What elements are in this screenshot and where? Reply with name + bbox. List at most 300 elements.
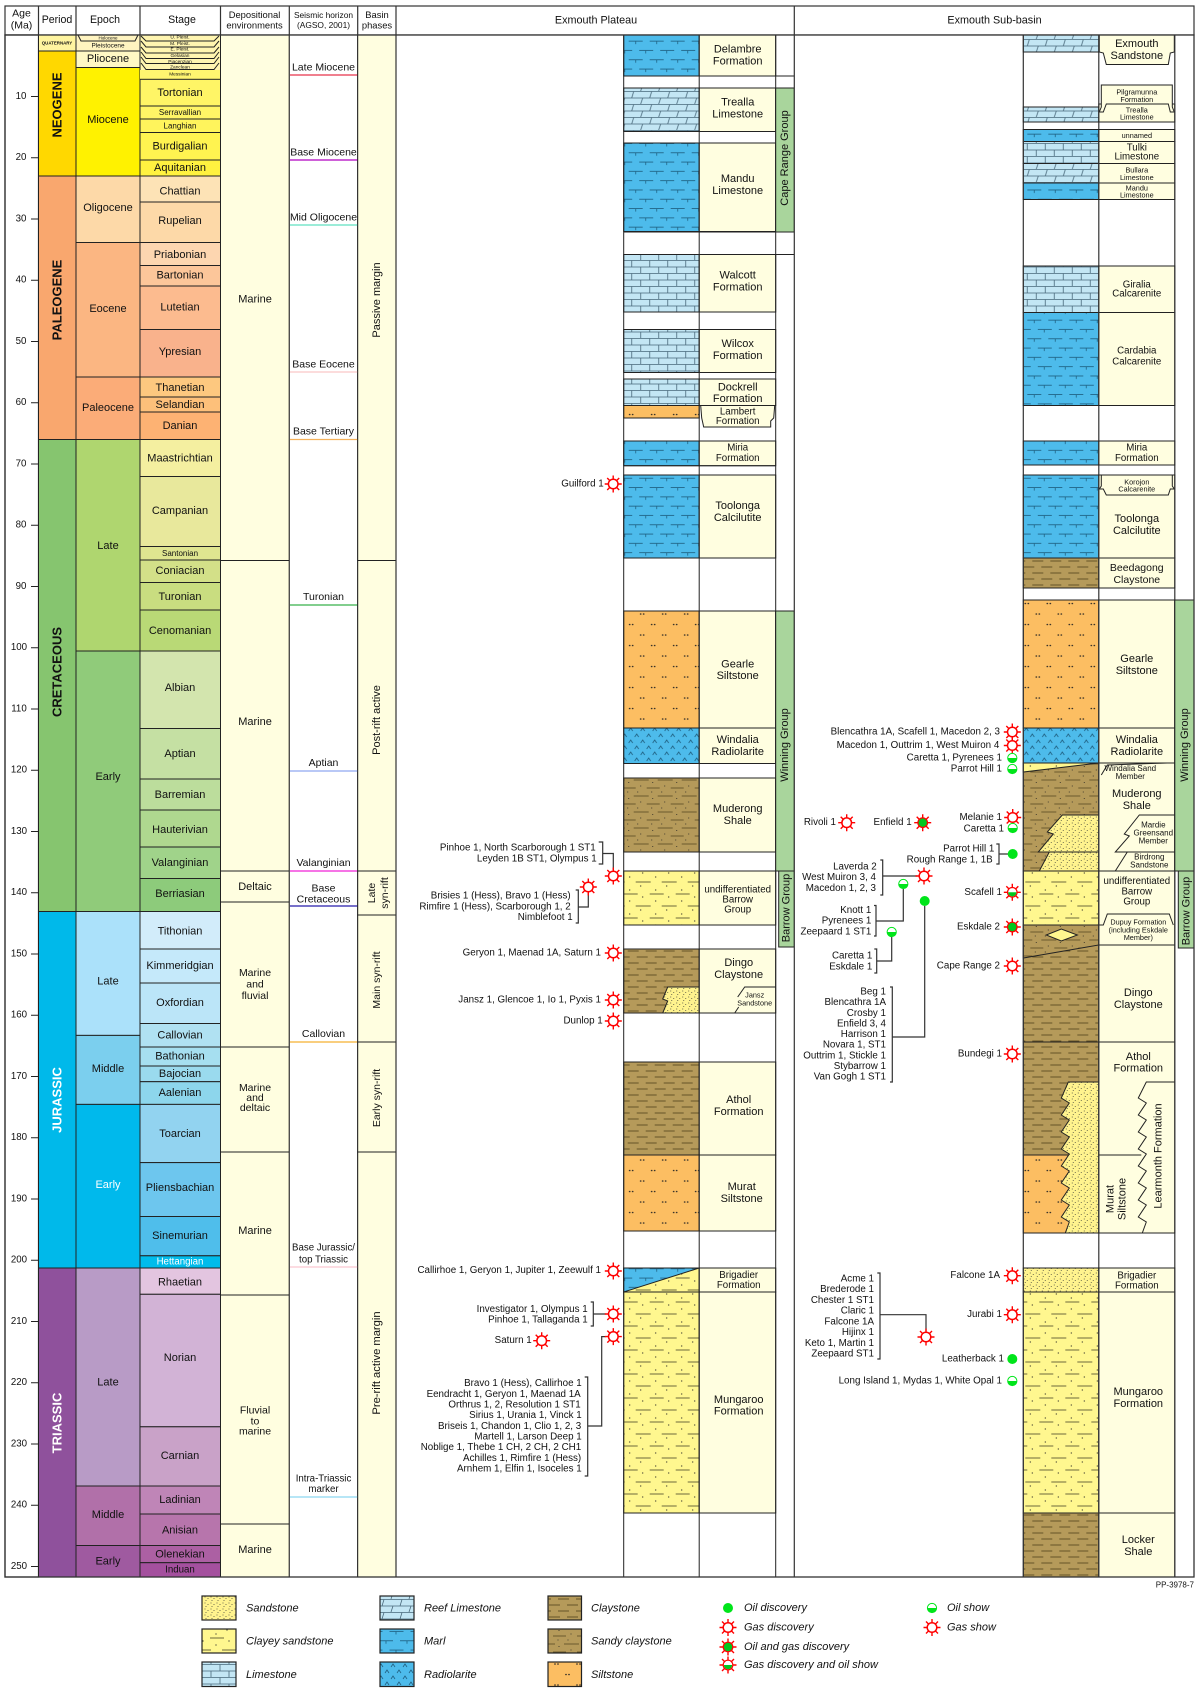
seismic horizon column: Base Eocene xyxy=(292,358,355,370)
lithology and formation: Mandu: Limestone xyxy=(1120,190,1154,200)
epoch: Early Jurassic xyxy=(76,1104,140,1268)
well label: Jurabi 1 xyxy=(967,1306,1021,1323)
well group: Knott, Pyrenees, Zeepaard xyxy=(800,879,908,938)
lithology and formation: Pilgramunna and Trealla: Pilgramunna xyxy=(1116,88,1158,96)
lithology and formation: Lambert: Lambert xyxy=(720,406,756,418)
lithology and formation: Locker Shale: Locker xyxy=(1122,1534,1155,1546)
stage: Selandian: Selandian xyxy=(156,399,204,411)
stage: Ladinian: Ladinian xyxy=(159,1494,201,1506)
well group: Beg to Van Gogh: Van Gogh 1 ST1 xyxy=(814,1072,886,1083)
lithology and formation: Muderong xyxy=(624,778,776,852)
group label: Barrow Group xyxy=(779,871,794,947)
stage: Induan xyxy=(140,1563,220,1577)
stage: Sinemurian xyxy=(140,1216,220,1256)
well group: Knott, Pyrenees, Zeepaard: Pyrenees 1 xyxy=(822,916,871,926)
basin phases column xyxy=(358,35,396,1577)
stage: Callovian: Callovian xyxy=(157,1030,203,1042)
stage: Quaternary to Messinian narrow stages: Zanclean xyxy=(170,65,190,71)
well group: Acme to Zeepaard: Keto 1, Martin 1 xyxy=(805,1338,874,1349)
stage: Callovian xyxy=(140,1024,220,1047)
stage: Santonian: Santonian xyxy=(162,549,198,558)
stage: Lutetian: Lutetian xyxy=(160,302,200,314)
lithology and formation: Pilgramunna and Trealla: Limestone xyxy=(1120,112,1154,122)
lithology and formation: Barrow Group and Dupuy: Group xyxy=(1123,896,1150,908)
age axis: 180 xyxy=(11,1132,28,1143)
well label: Jurabi 1: Jurabi 1 xyxy=(967,1309,1002,1320)
well group: Brisies, Rimfire: Nimblefoot 1 xyxy=(518,912,573,923)
lithology and formation: Dingo: Jansz xyxy=(745,990,765,1000)
stage: Rhaetian: Rhaetian xyxy=(158,1276,202,1288)
lithology and formation: Barrow Group and Dupuy: Dupuy Formation xyxy=(1110,918,1166,926)
chart header row: environments xyxy=(226,20,283,30)
panel: Exmouth Plateau column xyxy=(396,35,794,1577)
stage: Olenekian xyxy=(140,1546,220,1563)
well label: Rivoli 1 xyxy=(804,814,855,831)
lithology and formation: Mungaroo xyxy=(1023,1292,1175,1513)
seismic horizon column: Cretaceous xyxy=(297,894,350,906)
chart header row: Exmouth Plateau xyxy=(555,14,637,26)
stage: Tithonian xyxy=(140,912,220,949)
lithology and formation: Walcott: Walcott xyxy=(720,270,756,282)
seismic horizon column: Valanginian xyxy=(296,857,351,869)
well label: Falcone 1A xyxy=(950,1267,1021,1284)
lithology and formation: Delambre: Delambre xyxy=(714,44,762,56)
well group: Beg to Van Gogh: Harrison 1 xyxy=(841,1029,886,1040)
stage: Coniacian xyxy=(140,560,220,582)
well label: Enfield 1: Enfield 1 xyxy=(874,817,912,828)
lithology and formation: Mandu Limestone: Mandu xyxy=(721,173,755,185)
well group: Pinhoe, Leyden: Leyden 1B ST1, Olympus 1 xyxy=(477,854,597,864)
period: Quaternary xyxy=(38,35,76,51)
stage: Bajocian xyxy=(140,1066,220,1082)
stage: Aptian: Aptian xyxy=(164,748,196,760)
well group: Bravo to Arnhem: Martell 1, Larson Deep 1 xyxy=(474,1432,582,1442)
lithology and formation: Brigadier: Brigadier xyxy=(1117,1270,1157,1282)
seismic horizon column: Late Miocene xyxy=(292,62,355,74)
group label: Cape Range Group: Cape Range Group xyxy=(779,110,791,206)
age axis: 30 xyxy=(16,214,27,224)
lithology and formation: Korojon and Toolonga xyxy=(1023,475,1175,558)
epoch: Holocene and Pleistocene xyxy=(76,35,140,51)
well group: Beg to Van Gogh: Outtrim 1, Stickle 1 xyxy=(803,1050,886,1061)
age axis: 210 xyxy=(11,1316,28,1327)
lithology and formation: Locker Shale: Shale xyxy=(1124,1546,1152,1558)
epoch column xyxy=(76,35,140,1577)
legend: Clayey sandstone: Clayey sandstone xyxy=(246,1636,333,1648)
lithology and formation: Bullara: Limestone xyxy=(1120,173,1154,182)
stage: Maastrichtian: Maastrichtian xyxy=(147,452,213,464)
lithology and formation: unnamed xyxy=(1023,130,1175,142)
well group: Beg to Van Gogh: Crosby 1 xyxy=(847,1008,886,1019)
age axis: 20 xyxy=(16,152,27,163)
stage: Anisian xyxy=(140,1514,220,1546)
stage: Carnian: Carnian xyxy=(161,1450,199,1462)
lithology and formation: Barrow Group: Barrow xyxy=(722,894,754,906)
lithology and formation: Barrow Group and Dupuy: undifferentiated xyxy=(1103,876,1170,887)
lithology and formation: Gearle xyxy=(1023,600,1175,728)
well group: Knott, Pyrenees, Zeepaard: Zeepaard 1 ST1 xyxy=(800,926,871,938)
stage: Bartonian xyxy=(140,266,220,286)
legend: Sandy claystone xyxy=(548,1629,672,1653)
lithology and formation: Brigadier xyxy=(1023,1268,1175,1292)
well group: Pinhoe, Leyden: Pinhoe 1, North Scarborough 1 ST1 xyxy=(440,842,596,854)
lithology and formation: Barrow Group and Dupuy: Barrow xyxy=(1121,886,1153,898)
age axis: 150 xyxy=(11,948,28,960)
lithology and formation: Cardabia: Cardabia xyxy=(1117,346,1157,356)
stage: Norian xyxy=(140,1294,220,1427)
epoch: Miocene: Miocene xyxy=(87,114,129,126)
epoch: Oligocene xyxy=(76,176,140,242)
depositional environments column: Fluvial xyxy=(240,1404,270,1416)
chart header row: Epoch xyxy=(90,14,120,26)
well group: Beg to Van Gogh xyxy=(803,896,930,1083)
lithology and formation: Barrow Group: undifferentiated xyxy=(704,884,771,896)
legend: Oil discovery: Oil discovery xyxy=(744,1602,808,1614)
stage: Sinemurian: Sinemurian xyxy=(152,1230,208,1242)
lithology and formation: Brigadier: Formation xyxy=(717,1280,761,1291)
lithology and formation: Dingo: Claystone xyxy=(714,969,763,981)
group label: Barrow Group: Barrow Group xyxy=(781,874,793,942)
well group: Caretta, Eskdale: Caretta 1 xyxy=(832,950,872,962)
lithology and formation: Gearle: Gearle xyxy=(1120,653,1153,665)
lithology and formation: Dockrell: Dockrell xyxy=(718,382,758,394)
stage: Hauterivian: Hauterivian xyxy=(152,824,208,836)
legend: Siltstone: Siltstone xyxy=(591,1669,633,1681)
chart header row: Depositional xyxy=(229,9,280,20)
stage: Danian: Danian xyxy=(163,420,197,432)
depositional environments column: Marine xyxy=(239,1082,271,1094)
age axis: 110 xyxy=(11,704,27,714)
stage: Barremian xyxy=(140,779,220,810)
lithology and formation: Toolonga xyxy=(624,475,776,558)
lithology and formation: Mandu: Mandu xyxy=(1126,184,1148,192)
lithology and formation: Barrow Group and Dupuy: Member) xyxy=(1124,933,1153,942)
stage: Tortonian xyxy=(140,79,220,106)
period: Neogene xyxy=(38,51,76,176)
lithology and formation: Athol, Murat and Learmonth xyxy=(1023,1042,1175,1233)
stage: Quaternary to Messinian narrow stages: Gelasian xyxy=(171,53,190,59)
lithology and formation: Gearle xyxy=(624,611,776,728)
lithology and formation: Wilcox: Wilcox xyxy=(722,338,754,350)
well label: Scafell 1: Scafell 1 xyxy=(964,887,1002,898)
lithology and formation: Windalia: Windalia xyxy=(717,734,760,746)
stage: Bartonian: Bartonian xyxy=(156,270,204,282)
well group: Bravo to Arnhem: Noblige 1, Thebe 1 CH, 2 CH, 2 CH1 xyxy=(421,1442,581,1453)
lithology and formation: Barrow Group and Dupuy: Claystone xyxy=(1114,999,1163,1011)
age axis: 60 xyxy=(16,397,27,408)
lithology and formation: Walcott xyxy=(624,254,776,312)
lithology and formation: Barrow Group and Dupuy xyxy=(1023,871,1175,1042)
stage: Selandian xyxy=(140,397,220,412)
lithology and formation: Beedagong: Beedagong xyxy=(1110,562,1164,574)
legend: Radiolarite: Radiolarite xyxy=(424,1669,477,1681)
epoch: Early Cretaceous: Early xyxy=(95,771,121,783)
lithology and formation: Brigadier: Formation xyxy=(1115,1280,1159,1292)
stage: Burdigalian: Burdigalian xyxy=(152,140,208,152)
depositional environments column xyxy=(220,35,289,1577)
stage: Turonian: Turonian xyxy=(158,591,202,603)
period: Cretaceous: CRETACEOUS xyxy=(50,627,64,717)
lithology and formation: Dockrell: Formation xyxy=(713,393,762,405)
stage: Bajocian: Bajocian xyxy=(159,1068,201,1080)
legend: Oil and gas discovery xyxy=(720,1638,851,1656)
legend: Limestone: Limestone xyxy=(246,1669,297,1681)
basin phases column: Early syn-rift xyxy=(371,1069,383,1127)
epoch: Late Jurassic xyxy=(76,912,140,1035)
well group: Brisies, Rimfire xyxy=(419,878,597,923)
well group: Acme to Zeepaard: Chester 1 ST1 xyxy=(811,1295,874,1306)
lithology and formation: Tulki: Tulki xyxy=(1127,142,1147,154)
depositional environments column: fluvial xyxy=(242,990,268,1002)
depositional environments column: and xyxy=(246,978,264,990)
epoch: Late Triassic: Late xyxy=(97,1377,119,1389)
period: Jurassic xyxy=(38,912,76,1268)
period: Quaternary: QUATERNARY xyxy=(42,40,72,46)
depositional environments column: Deltaic xyxy=(238,881,272,893)
well group: Bravo to Arnhem: Eendracht 1, Geryon 1, Maenad 1A xyxy=(427,1389,581,1400)
well group: Investigator, Pinhoe: Investigator 1, Olympus 1 xyxy=(477,1304,588,1315)
stage: Quaternary to Messinian narrow stages: E. Pleist. xyxy=(171,47,189,53)
legend: Sandy claystone: Sandy claystone xyxy=(591,1636,672,1648)
well label: Melanie 1 xyxy=(960,809,1021,826)
legend: Claystone: Claystone xyxy=(591,1602,640,1614)
legend: Claystone xyxy=(548,1596,640,1620)
lithology and formation: Cardabia xyxy=(1023,312,1175,406)
lithology and formation: Dingo: Dingo xyxy=(724,957,753,969)
well label: Cape Range 2: Cape Range 2 xyxy=(937,960,1000,972)
depositional environments column: Marine xyxy=(238,1225,272,1237)
legend xyxy=(202,1596,997,1686)
well group: Acme to Zeepaard: Acme 1 xyxy=(841,1274,874,1284)
legend: Sandstone xyxy=(202,1596,299,1620)
lithology and formation: Murat xyxy=(624,1155,776,1231)
well label: Bundegi 1: Bundegi 1 xyxy=(958,1048,1002,1060)
stage: Kimmeridgian: Kimmeridgian xyxy=(146,960,214,972)
seismic horizon column: Mid Oligocene xyxy=(290,212,357,224)
lithology and formation: Beedagong xyxy=(1023,558,1175,588)
legend: Radiolarite xyxy=(380,1662,477,1686)
stage: Priabonian xyxy=(140,242,220,266)
stage: Santonian xyxy=(140,546,220,560)
lithology and formation: Gearle: Siltstone xyxy=(1116,665,1158,677)
stage: Aquitanian xyxy=(140,160,220,176)
period: Neogene: NEOGENE xyxy=(50,72,64,138)
stage: Valanginian xyxy=(140,847,220,878)
depositional environments column: Marine xyxy=(238,1544,272,1556)
group label: Cape Range Group xyxy=(776,88,794,232)
lithology and formation: Exmouth Sandstone: Sandstone xyxy=(1110,50,1163,62)
stage: Rupelian xyxy=(140,202,220,242)
epoch: Late Triassic xyxy=(76,1268,140,1486)
lithology and formation: Athol: Formation xyxy=(714,1106,763,1118)
basin phases column: Late xyxy=(366,883,378,903)
period: Paleogene: PALEOGENE xyxy=(50,259,64,340)
stage: Hauterivian xyxy=(140,810,220,847)
age axis: 10 xyxy=(16,91,27,102)
stage: Langhian xyxy=(140,119,220,132)
seismic horizon column: top Triassic xyxy=(299,1254,348,1266)
well group: Acme to Zeepaard: Brederode 1 xyxy=(820,1284,874,1295)
seismic horizon column: Aptian xyxy=(309,757,339,769)
group label: Winning Group xyxy=(1175,600,1194,871)
well group: Pinhoe, Leyden xyxy=(440,842,622,884)
lithology and formation: Athol: Athol xyxy=(726,1094,751,1106)
lithology and formation: Brigadier xyxy=(624,1268,776,1292)
stage: Kimmeridgian xyxy=(140,949,220,983)
well group: Laverda, West Muiron, Macedon: Macedon 1, 2, 3 xyxy=(806,883,877,894)
well group: Beg to Van Gogh: Enfield 3, 4 xyxy=(837,1018,887,1030)
well group: Acme to Zeepaard xyxy=(805,1273,934,1360)
legend: Reef Limestone xyxy=(380,1596,501,1620)
legend: Oil and gas discovery: Oil and gas discovery xyxy=(744,1641,851,1653)
stage: Danian xyxy=(140,412,220,440)
basin phases column: Post-rift active xyxy=(371,685,383,755)
seismic horizon column: Base Miocene xyxy=(290,146,357,158)
lithology and formation: Miria: Formation xyxy=(1115,453,1159,464)
stage: Serravallian xyxy=(140,106,220,119)
well group: Bravo to Arnhem: Arnhem 1, Elfin 1, Isoceles 1 xyxy=(457,1464,582,1474)
well group: Bravo to Arnhem: Bravo 1 (Hess), Callirhoe 1 xyxy=(464,1378,582,1389)
lithology and formation: Athol xyxy=(624,1062,776,1155)
epoch: Holocene and Pleistocene: Pleistocene xyxy=(91,42,125,50)
stage: Quaternary to Messinian narrow stages: M. Pleist. xyxy=(170,41,190,47)
lithology and formation: Athol, Murat and Learmonth: Formation xyxy=(1114,1062,1163,1074)
legend: Clayey sandstone xyxy=(202,1629,333,1653)
age axis xyxy=(5,35,38,1577)
age axis: 190 xyxy=(11,1194,28,1204)
well label: Caretta 1: Caretta 1 xyxy=(964,824,1004,834)
legend: Gas discovery: Gas discovery xyxy=(744,1622,815,1634)
well label: Rivoli 1: Rivoli 1 xyxy=(804,817,836,828)
lithology and formation: Beedagong: Claystone xyxy=(1113,574,1160,586)
well label: Dunlop 1: Dunlop 1 xyxy=(563,1016,603,1026)
well label: Long Island, Mydas, White Opal: Long Island 1, Mydas 1, White Opal 1 xyxy=(839,1376,1002,1386)
stage: Tortonian: Tortonian xyxy=(157,87,203,99)
lithology and formation: Windalia xyxy=(624,728,776,764)
lithology and formation: Bullara: Bullara xyxy=(1125,166,1149,174)
well label: Jansz, Glencoe, Io, Pyxis xyxy=(458,992,622,1008)
lithology and formation: Muderong with members: Member xyxy=(1139,836,1168,846)
lithology and formation: Barrow Group xyxy=(624,871,776,925)
well label: Bundegi 1 xyxy=(958,1046,1021,1062)
well group: Brisies, Rimfire: Brisies 1 (Hess), Bravo 1 (Hess) xyxy=(431,890,571,902)
lithology and formation: Murat: Murat xyxy=(728,1181,756,1193)
well label: Melanie 1: Melanie 1 xyxy=(960,812,1002,823)
chart header row: Basin xyxy=(365,9,389,20)
well group: Laverda, West Muiron, Macedon xyxy=(802,860,932,895)
lithology and formation: Dockrell xyxy=(624,379,776,406)
lithology and formation: Muderong with members: Birdrong xyxy=(1134,852,1164,862)
lithology and formation: Miria: Formation xyxy=(716,453,760,464)
well group: Beg to Van Gogh: Novara 1, ST1 xyxy=(823,1040,886,1051)
epoch: Middle Jurassic: Middle xyxy=(92,1063,124,1075)
seismic horizon column: marker xyxy=(308,1484,339,1495)
stage: Campanian: Campanian xyxy=(152,505,208,517)
epoch: Early Triassic xyxy=(76,1546,140,1577)
lithology and formation: Miria: Miria xyxy=(1126,442,1148,454)
well group: Parrot Hill, Rough Range xyxy=(907,844,1018,866)
stage: Quaternary to Messinian narrow stages: Messinian xyxy=(169,72,191,78)
well group: Bravo to Arnhem: Orthrus 1, 2, Resolution 1 ST1 xyxy=(448,1400,581,1410)
stage: Albian xyxy=(140,651,220,728)
well label: Dunlop 1 xyxy=(563,1012,622,1030)
epoch: Oligocene: Oligocene xyxy=(83,202,133,214)
stage: Turonian xyxy=(140,582,220,610)
well label: Scafell 1 xyxy=(964,884,1021,901)
age axis: 140 xyxy=(11,887,28,898)
well group: Acme to Zeepaard: Hijinx 1 xyxy=(842,1327,874,1338)
group label: Winning Group xyxy=(776,611,794,871)
lithology and formation: Korojon and Toolonga: Calcilutite xyxy=(1113,525,1161,537)
stage: Oxfordian: Oxfordian xyxy=(156,997,204,1009)
stage: Barremian: Barremian xyxy=(155,789,205,801)
lithology and formation: Walcott: Formation xyxy=(713,282,762,294)
lithology and formation: Tulki: Limestone xyxy=(1114,152,1159,162)
well group: Parrot Hill, Rough Range: Parrot Hill 1 xyxy=(943,844,994,854)
stage: Rupelian: Rupelian xyxy=(158,215,202,227)
stage: Coniacian: Coniacian xyxy=(156,565,204,577)
seismic horizon column: Base Tertiary xyxy=(293,426,355,438)
well label: Parrot Hill 1: Parrot Hill 1 xyxy=(951,764,1002,774)
stage: Quaternary to Messinian narrow stages: Piacenzian xyxy=(168,59,192,65)
seismic horizon column: Intra-Triassic xyxy=(296,1474,351,1484)
age axis: 170 xyxy=(11,1071,28,1082)
lithology and formation: Muderong with members: Shale xyxy=(1123,800,1151,812)
lithology and formation: Wilcox xyxy=(624,330,776,372)
lithology and formation: Muderong with members: Member xyxy=(1116,772,1145,781)
depositional environments column: Marine xyxy=(238,716,272,728)
stage: Hettangian xyxy=(140,1256,220,1268)
period: Triassic: TRIASSIC xyxy=(50,1392,64,1453)
lithology and formation: Muderong with members: Greensand xyxy=(1134,828,1173,838)
lithology and formation: Miria xyxy=(1023,441,1175,465)
well label: Saturn 1: Saturn 1 xyxy=(495,1335,532,1346)
stage: Oxfordian xyxy=(140,983,220,1024)
lithology and formation: Windalia: Radiolarite xyxy=(1111,746,1163,758)
stage: Albian: Albian xyxy=(165,682,195,694)
stage: Tithonian: Tithonian xyxy=(158,926,202,938)
stage: Carnian xyxy=(140,1427,220,1486)
lithology and formation: Muderong: Shale xyxy=(724,815,752,827)
lithology and formation: Muderong with members: Windalia Sand xyxy=(1105,764,1156,773)
well group: Parrot Hill, Rough Range: Rough Range 1, 1B xyxy=(907,854,993,866)
well group: Caretta, Eskdale: Eskdale 1 xyxy=(829,962,872,972)
lithology and formation: Trealla Limestone xyxy=(624,88,776,132)
legend: Gas discovery and oil show xyxy=(720,1656,879,1674)
age axis: 40 xyxy=(16,275,27,286)
lithology and formation: Muderong with members: Muderong xyxy=(1112,788,1162,800)
chart header row xyxy=(5,6,1194,35)
lithology and formation: Athol, Murat and Learmonth: Siltstone xyxy=(1116,1178,1128,1220)
seismic horizon column: Callovian xyxy=(302,1028,345,1040)
lithology and formation: Bullara xyxy=(1023,164,1175,183)
lithology and formation: Muderong with members xyxy=(1023,763,1175,871)
stage: Pliensbachian: Pliensbachian xyxy=(146,1182,214,1194)
chart header row: Period xyxy=(42,14,72,26)
well label: Eskdale 2 xyxy=(957,918,1021,936)
lithology and formation: Locker Shale xyxy=(1023,1513,1175,1577)
lithology and formation: Muderong: Muderong xyxy=(713,803,762,815)
well group: Beg to Van Gogh: Stybarrow 1 xyxy=(834,1061,886,1072)
well label: Macedon, Outtrim, West Muiron xyxy=(837,737,1021,754)
stage: Aptian xyxy=(140,728,220,779)
chart header row: (Ma) xyxy=(11,20,32,32)
well label: Saturn 1 xyxy=(495,1332,550,1349)
stage: Thanetian: Thanetian xyxy=(156,382,204,394)
stage: Quaternary to Messinian narrow stages xyxy=(140,35,220,79)
epoch: Middle Triassic xyxy=(76,1486,140,1546)
age axis: 160 xyxy=(11,1010,28,1021)
